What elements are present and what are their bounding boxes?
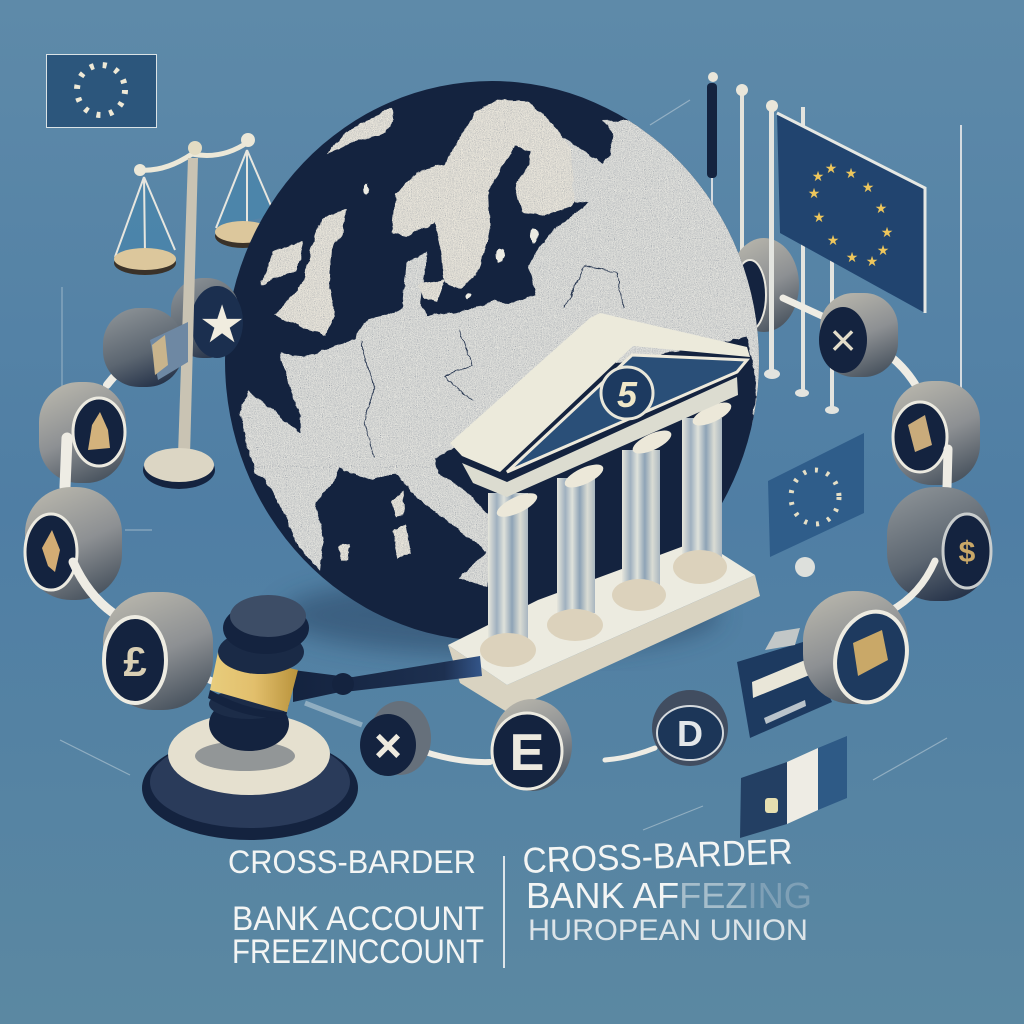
gavel head shadow [195,741,295,771]
node: cross [360,701,431,776]
large EU flag: ★ [846,249,858,265]
scale post in front of node [143,158,215,489]
globe with map of Europe [225,81,759,639]
large EU flag: ★ [827,232,839,248]
bank entablature [462,377,738,497]
bank coin emblem [601,367,653,419]
large EU flag: ★ [875,200,887,216]
right text block: Cross-Barder Bank Affezing European Union [522,831,812,947]
node: dollar right: $ [959,536,976,569]
node: star [171,278,245,358]
bank coin emblem: 5 [617,374,638,415]
node: pound: £ [123,638,147,685]
right text block: Cross-Barder Bank Affezing European Union: HUROPEAN UNION [528,914,808,947]
node: scroll [103,308,188,387]
bottom node ring [360,690,728,791]
globe shadow [280,575,720,655]
large EU flag: ★ [825,160,837,176]
left text block: Cross-Barder Bank Account Freezing: BANK ACCOUNT [232,900,484,938]
small middle EU flag [768,433,864,557]
left node ring [25,158,245,710]
large EU flag: ★ [813,209,825,225]
node: scroll right [803,591,917,710]
node: euro [492,699,572,791]
bank pediment [507,355,747,472]
flag poles [707,72,962,414]
node: crest [39,382,126,483]
large EU flag: ★ [812,168,824,184]
faint gavel connector [305,703,362,725]
large EU flag: ★ [845,165,857,181]
bank roof [450,313,750,472]
node: letter D: D [677,713,703,754]
node: crest right [892,381,980,485]
bank capitals [494,398,734,522]
left text block: Cross-Barder Bank Account Freezing: CROSS-BARDER [228,844,476,880]
right text block: Cross-Barder Bank Affezing European Union: BANK AFFEZING [526,875,812,916]
gavel handle [293,656,482,702]
gavel sound block [142,736,358,840]
text divider [503,856,505,968]
bank building [448,313,760,712]
right text block: Cross-Barder Bank Affezing European Union: CROSS-BARDER [522,831,793,881]
left text block: Cross-Barder Bank Account Freezing [228,844,484,971]
node: crest lower [25,487,122,600]
bank columns [480,418,727,667]
node: pound [103,592,213,710]
right top node behind globe [729,238,799,332]
right node ring [737,293,991,738]
icon: bottom tricolor flag [740,736,847,838]
faint decorative sparkle lines [60,100,947,830]
node: star: ★ [199,296,245,354]
node: letter D [652,690,728,766]
left text block: Cross-Barder Bank Account Freezing: FREEZINCCOUNT [232,933,484,971]
large EU flag: ★ [881,224,893,240]
large EU flag: ★ [862,179,874,195]
icon: small EU flag top-left [46,54,156,128]
gavel head [208,595,309,751]
small decorative dot [795,557,815,577]
node: euro: E [510,724,544,782]
large EU flag: ★ [877,242,889,258]
node: dollar right [887,487,991,601]
large EU flag: ★ [808,185,820,201]
bank base steps [448,575,760,712]
gavel [142,595,482,840]
pole in front of upper node [764,100,780,379]
node: cross: × [374,720,402,773]
icon: bank card [737,628,832,738]
scales of justice [114,133,275,275]
large EU flag: ★ [866,253,878,269]
connector between crests [65,438,67,487]
chain connectors [73,298,935,762]
node: X top [819,293,898,377]
large EU flag [777,113,925,313]
node: X top: × [830,314,856,366]
map land masses [239,100,817,587]
